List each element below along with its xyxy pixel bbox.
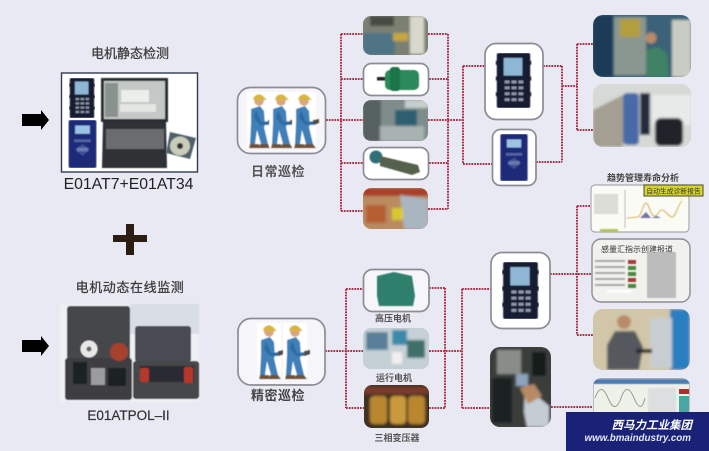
- heading: online monitoring: 电机动态在线监测: [76, 280, 184, 295]
- icon: handheld blue: [69, 120, 96, 168]
- callout: auto report: [644, 185, 703, 196]
- label: daily patrol: 日常巡检: [251, 164, 305, 179]
- callout: auto report: 自动生成诊断报告: [646, 186, 701, 196]
- chart: trend analysis: [591, 185, 689, 232]
- company name: 西马力工业集团: [612, 419, 693, 432]
- panel: handheld black: [491, 252, 550, 328]
- icon: worker 2: [269, 92, 296, 148]
- icon: worker 3: [292, 92, 319, 148]
- photo: running motor: [363, 328, 429, 369]
- label: high voltage motor: 高压电机: [375, 312, 411, 324]
- photo: inspectors in switch room: [593, 84, 691, 147]
- chart: waveform screen: [593, 378, 690, 412]
- heading: static detection: 电机静态检测: [91, 46, 169, 61]
- panel: online monitoring kit: [60, 304, 199, 402]
- company url: www.bmaindustry.com: [584, 433, 691, 444]
- panel: handheld blue: [492, 130, 536, 186]
- icon: cd: [166, 132, 196, 159]
- panel: sensor status table: [592, 239, 690, 302]
- connector: precision patrol network: [325, 206, 593, 408]
- panel: green motor: [364, 64, 428, 96]
- arrow: online monitoring: [22, 336, 49, 356]
- icon: worker 1: [257, 323, 284, 379]
- label: online kit model: E01ATPOL–II: [87, 408, 170, 423]
- icon: handheld black: [69, 78, 95, 118]
- panel: high voltage motor: [364, 270, 429, 312]
- panel: static test kit: [62, 73, 198, 172]
- photo: technician at cabinet: [593, 15, 691, 77]
- photo: measuring at terminal box: [490, 347, 551, 427]
- icon: worker 1: [247, 92, 274, 148]
- photo: technician with handheld: [593, 309, 690, 370]
- photo: motor rotor: [363, 188, 428, 229]
- arrow: static detection: [22, 110, 49, 130]
- photo: motor room: [363, 100, 428, 141]
- photo: plant pump: [363, 16, 428, 55]
- footer: company brand: [566, 412, 709, 451]
- label: running motor: 运行电机: [376, 372, 412, 383]
- label: transformer: 三相变压器: [374, 432, 420, 443]
- heading: status table: 感量汇指示创建报道: [601, 244, 673, 254]
- panel: daily patrol workers: [238, 88, 326, 154]
- panel: handheld black: [485, 44, 543, 120]
- label: static kit model: E01AT7+E01AT34: [64, 176, 194, 193]
- connector: daily patrol network: [326, 34, 593, 211]
- panel: pump: [364, 148, 428, 180]
- icon: worker 2: [283, 323, 310, 379]
- icon: plus: [113, 224, 147, 255]
- panel: precision patrol workers: [238, 318, 325, 385]
- table rows: [595, 252, 676, 298]
- heading: trend analysis: 趋势管理寿命分析: [607, 172, 679, 183]
- label: precision patrol: 精密巡检: [251, 388, 305, 403]
- photo: three phase transformer: [364, 385, 429, 428]
- icon: laptop: [101, 78, 168, 168]
